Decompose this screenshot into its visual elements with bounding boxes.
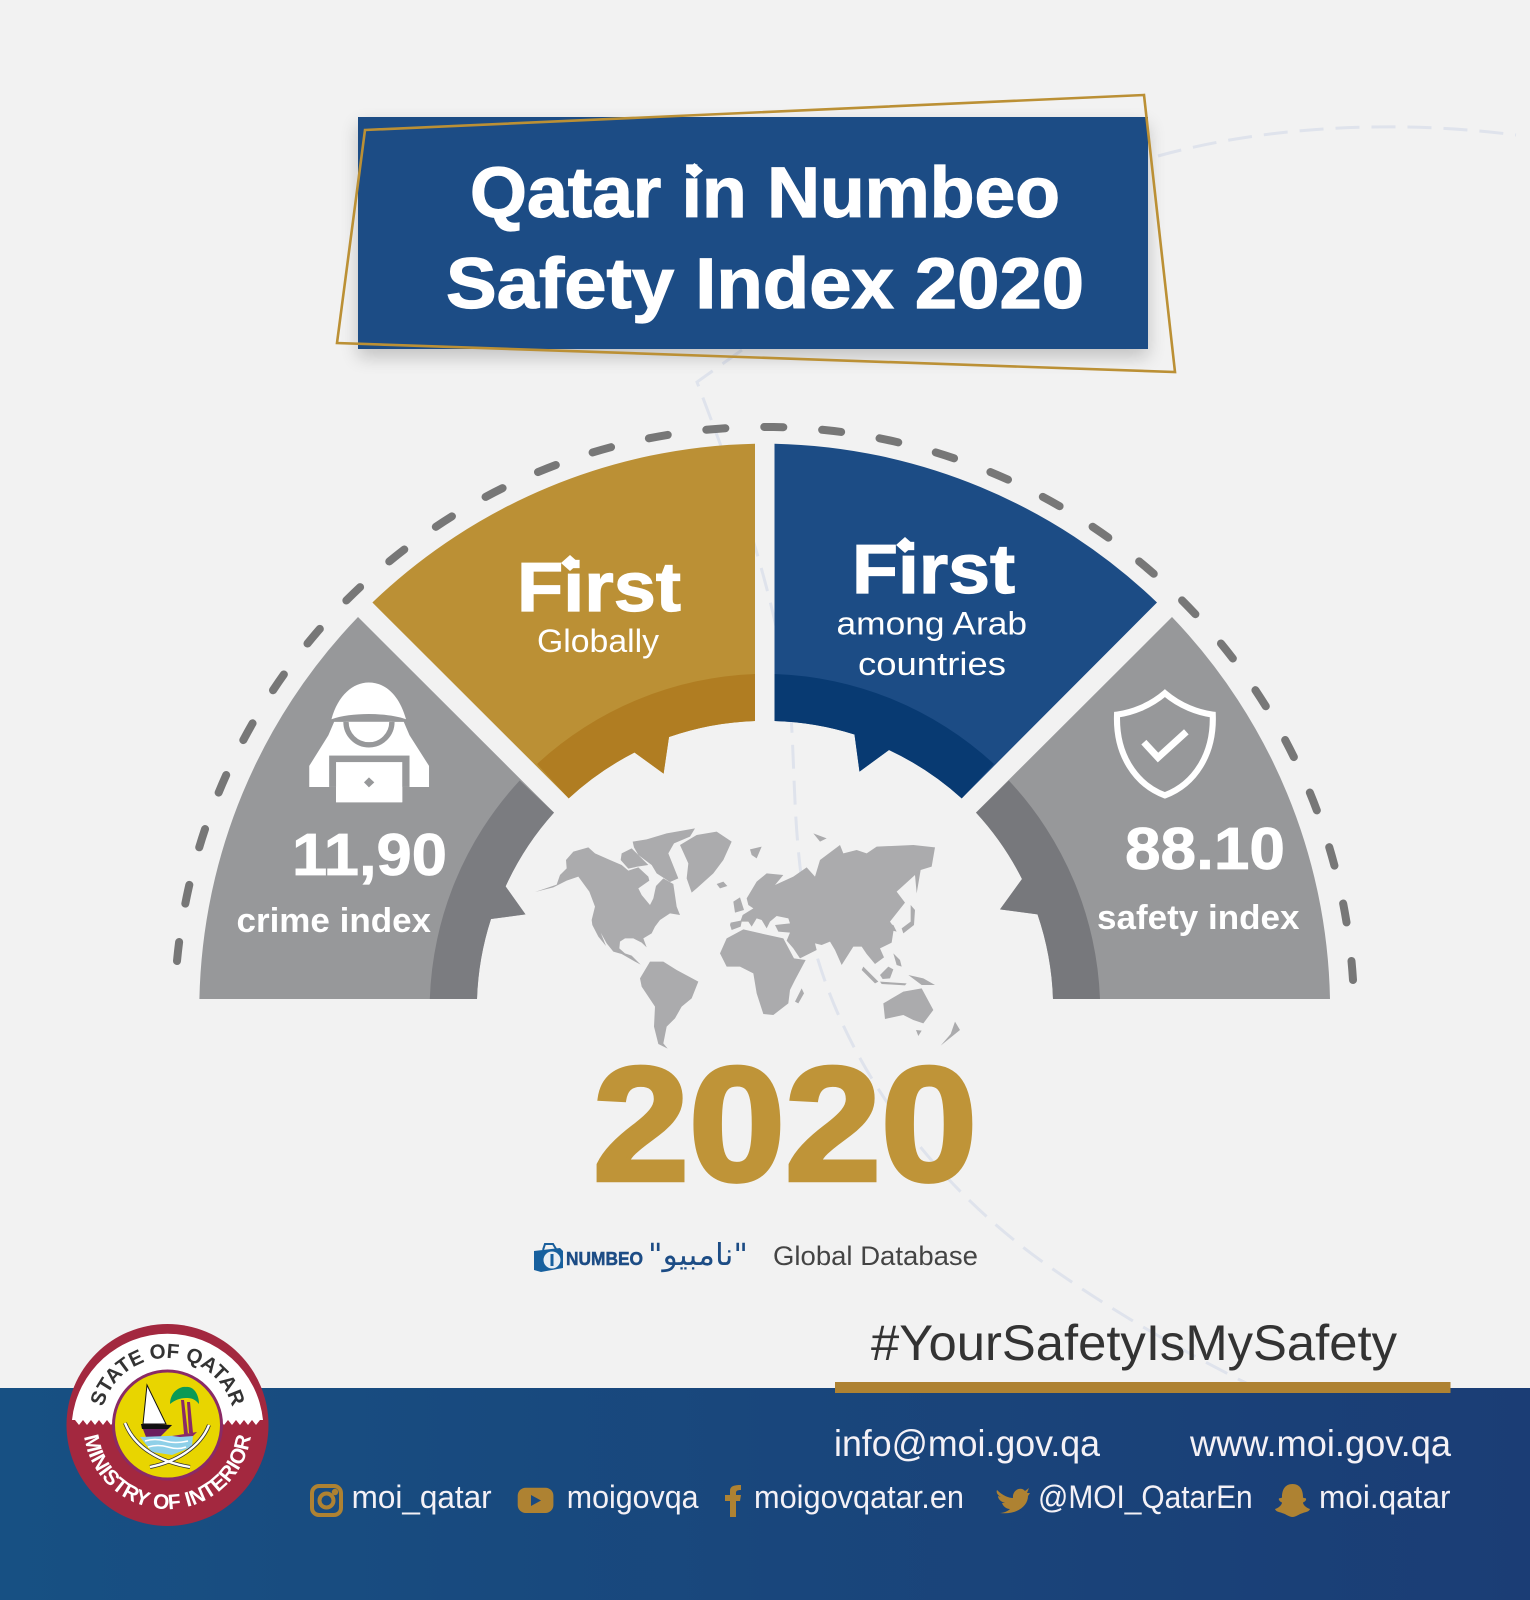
arabic name: "نامبيو" [648, 1238, 748, 1273]
icon: shield [1117, 693, 1213, 795]
icon: snapchat [1275, 1484, 1310, 1517]
seal text top: STATE OF QATAR [91, 1344, 244, 1406]
panel: safety index [976, 617, 1330, 999]
social: snapchat [1275, 1479, 1451, 1517]
source: Numbeo [534, 1238, 978, 1273]
panel: first among Arab countries [774, 444, 1157, 798]
footer band [0, 1388, 1530, 1600]
icon: hacker [309, 682, 429, 802]
contact: website: www.moi.gov.qa [1189, 1423, 1451, 1464]
value: 11,90: 11,90 [292, 822, 447, 888]
social: youtube [518, 1479, 699, 1515]
icon: numbeo suitcase [534, 1244, 563, 1272]
value: 88.10: 88.10 [1125, 816, 1285, 882]
icon: youtube [518, 1488, 553, 1513]
title text [446, 154, 1084, 324]
year 2020: 2020 [593, 1034, 977, 1215]
gold frame [337, 95, 1175, 372]
dashed arc [177, 427, 1353, 980]
handle: moigovqatar.en [754, 1479, 964, 1515]
label: among Arab countries [836, 606, 1027, 682]
label: Global Database: Global Database [773, 1241, 978, 1271]
title text: Safety Index 2020 [446, 245, 1084, 324]
title text: Qatar in Numbeo [470, 154, 1060, 233]
label: safety index: safety index [1097, 899, 1300, 937]
seal text bottom: MINISTRY OF INTERIOR [84, 1434, 251, 1510]
label: Globally: Globally [537, 623, 659, 659]
hashtag: #YourSafetyIsMySafety [871, 1315, 1397, 1371]
logo text: NUMBEO: NUMBEO [566, 1249, 643, 1269]
gold underline [835, 1382, 1450, 1393]
panel: crime index [199, 617, 554, 999]
seal emblem [114, 1371, 222, 1479]
icon: instagram [312, 1486, 341, 1515]
social: instagram [312, 1479, 492, 1515]
handle: moigovqa [567, 1479, 699, 1515]
heading: First: First [517, 548, 681, 626]
handle: moi_qatar [352, 1479, 492, 1515]
icon: twitter [997, 1488, 1030, 1513]
label: crime index: crime index [236, 902, 431, 940]
icon: facebook [725, 1485, 741, 1517]
handle: moi.qatar [1319, 1479, 1451, 1515]
handle: @MOI_QatarEn [1038, 1479, 1253, 1515]
contact: email: info@moi.gov.qa [834, 1423, 1100, 1464]
heading: First: First [852, 530, 1015, 608]
label: among Arab countries: among Arab [836, 606, 1027, 642]
panel: first globally [372, 444, 755, 798]
label: among Arab countries: countries [858, 646, 1006, 682]
logo: Ministry of Interior seal [66, 1324, 268, 1526]
social: facebook [725, 1479, 964, 1517]
world map [535, 828, 960, 1049]
title banner [337, 95, 1175, 372]
social: twitter [997, 1479, 1253, 1515]
